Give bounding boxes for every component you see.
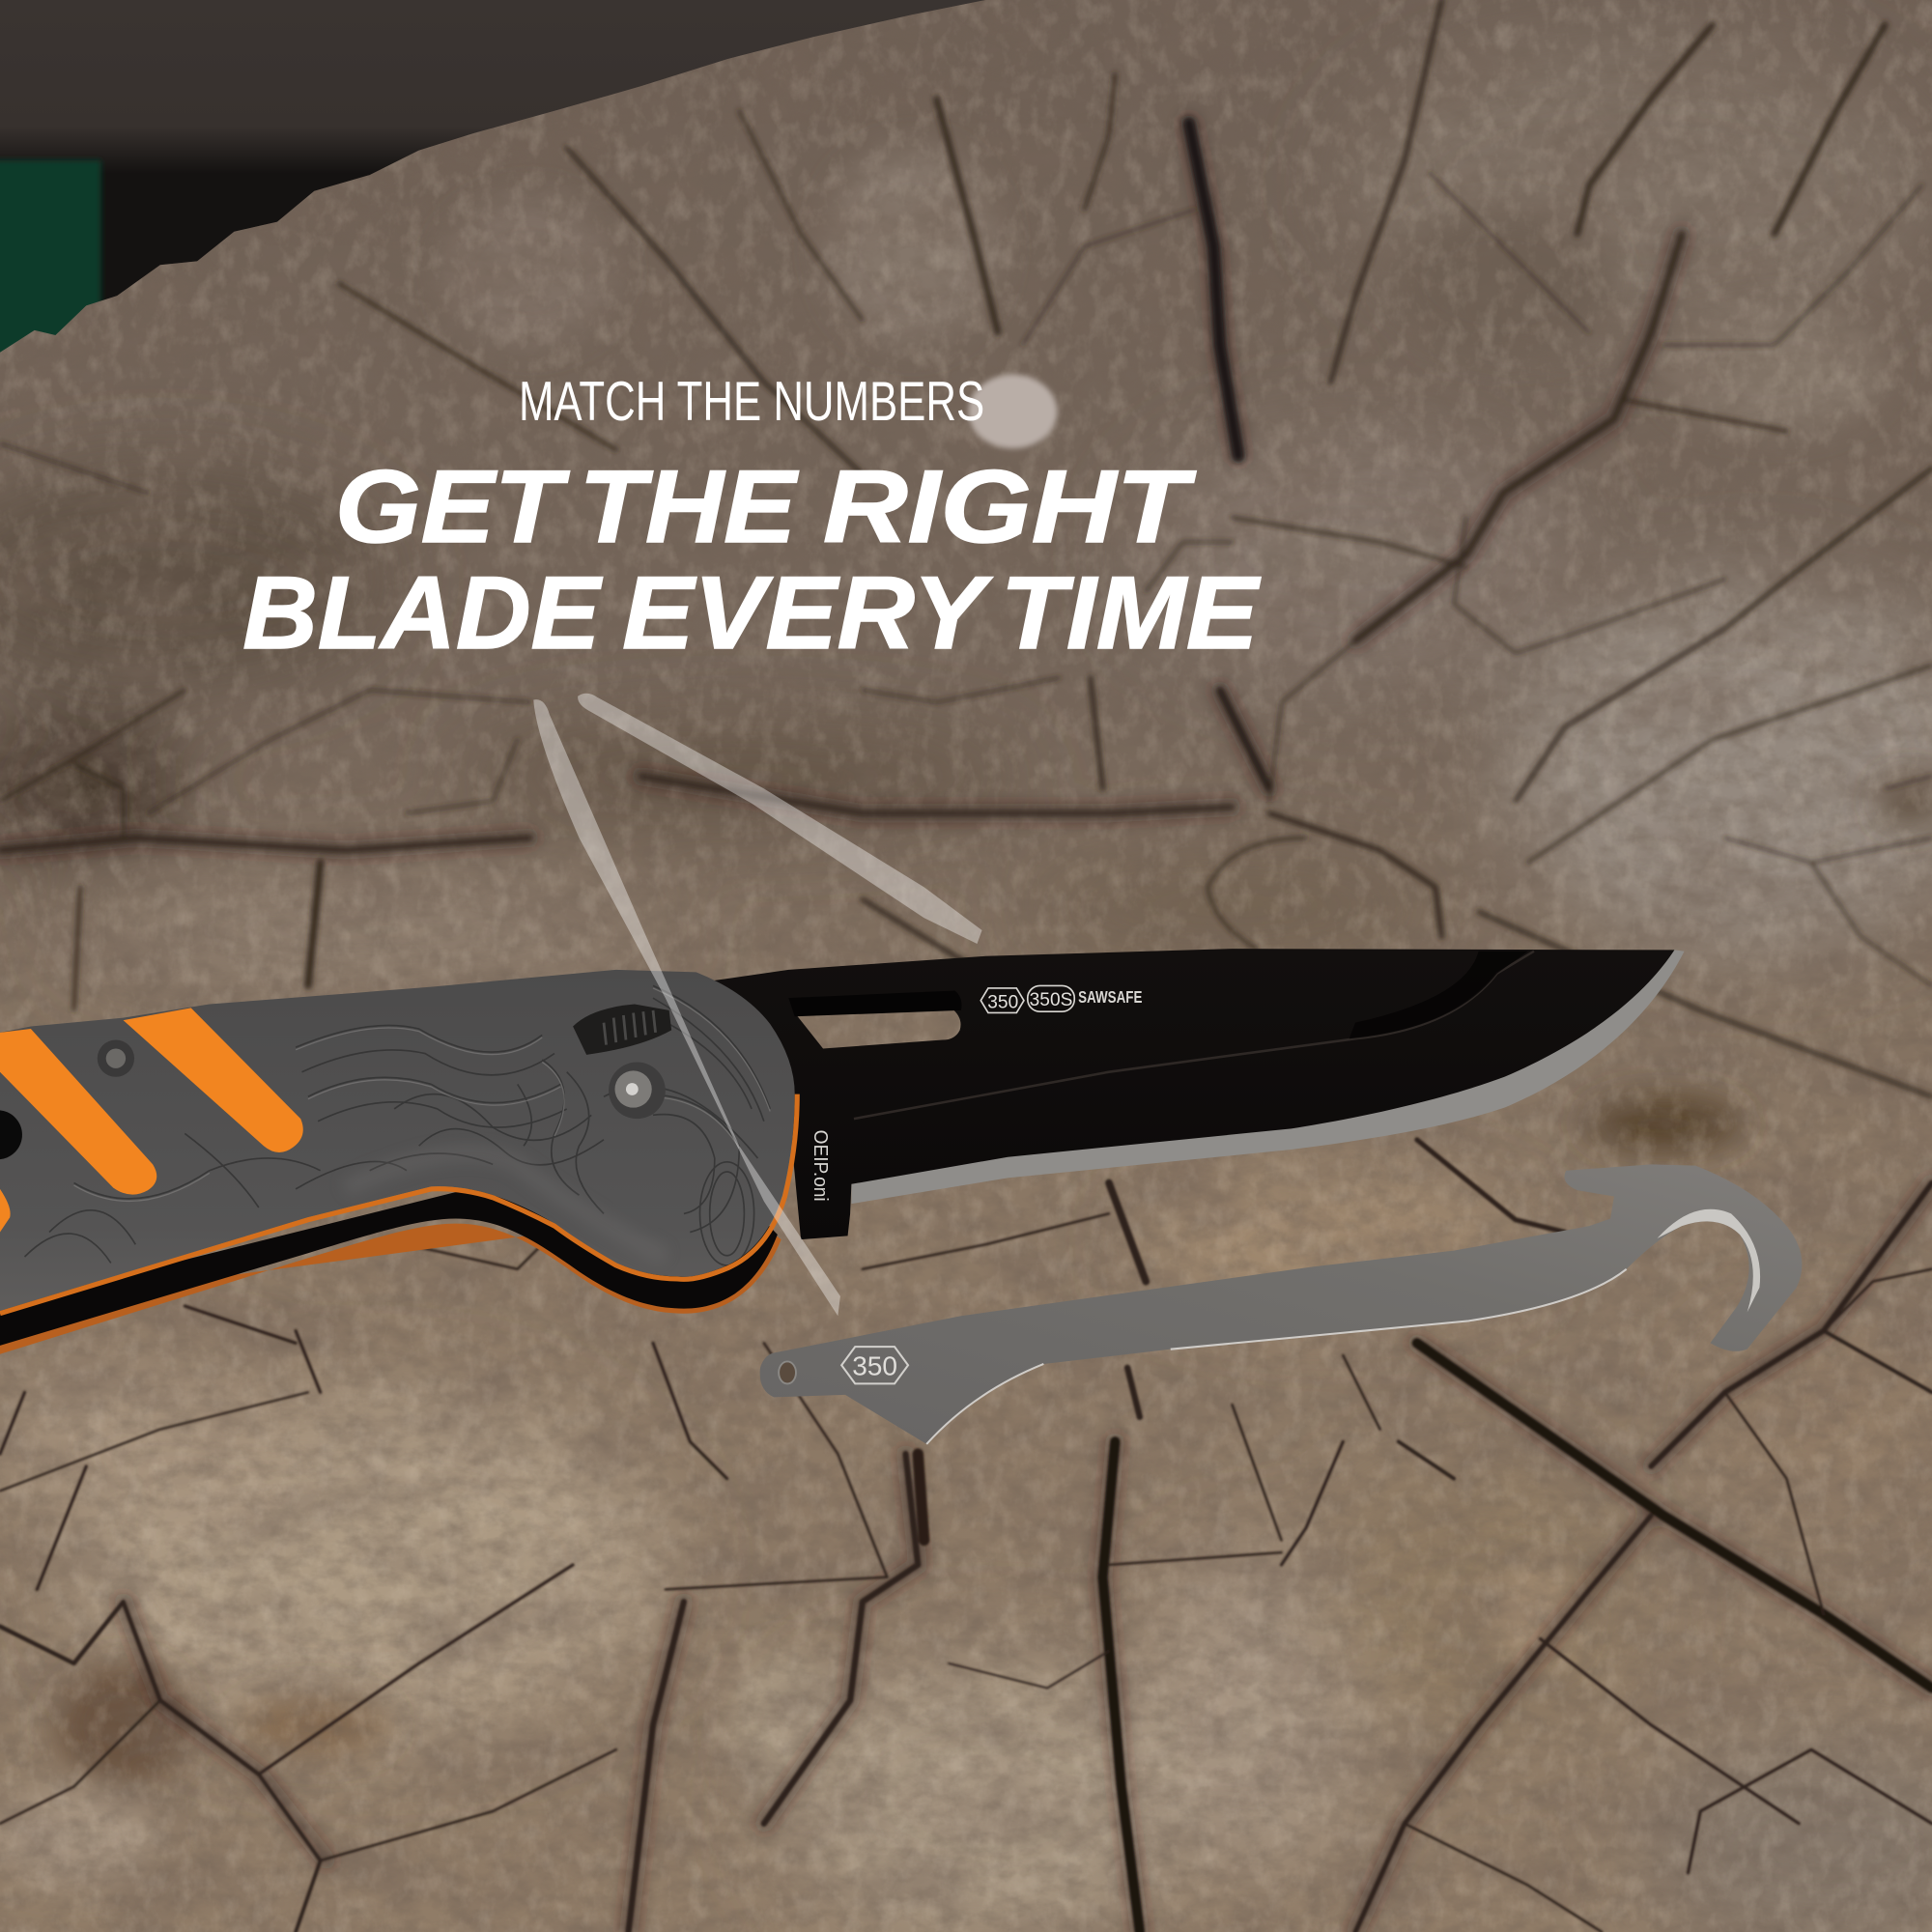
upper blurred cracks (0, 0, 1932, 1096)
headline line one: GET (335, 448, 570, 564)
fuller shade (1350, 952, 1528, 1038)
headline line two: BLADE (242, 554, 604, 670)
translucent brush stroke right (578, 694, 982, 944)
fuller line (854, 952, 1534, 1119)
hook bright inner face (1658, 1209, 1760, 1312)
thumb slider (573, 1005, 671, 1055)
dark background behind stump (0, 0, 1932, 394)
orange inlay upper (124, 1008, 303, 1152)
blade marking maker: OEIP.oni (810, 1130, 831, 1202)
headline line two: TIME (1001, 554, 1262, 670)
translucent brush stroke left (533, 699, 840, 1316)
rear black liner (0, 1182, 778, 1346)
hook lanyard hole (779, 1361, 796, 1383)
headline (242, 448, 1262, 670)
lower sharp cracks (0, 1140, 1932, 1932)
blade marking 350S text: 350S (1030, 990, 1072, 1010)
slot upper edge (788, 991, 961, 1016)
grey handle scale (0, 970, 795, 1311)
blade marking 350 text: 350 (987, 992, 1018, 1012)
handle screw (98, 1040, 134, 1077)
headline line two: EVERY (622, 554, 993, 670)
blade marking hexagon and pill (980, 985, 1074, 1012)
hook blade accessory (760, 1164, 1802, 1444)
hook body (760, 1164, 1802, 1444)
orange handle edge (0, 1094, 797, 1314)
pale stone on stump (969, 375, 1057, 448)
black pivot (0, 1110, 22, 1159)
hook 350 text: 350 (852, 1350, 897, 1380)
orange inlay fragment (0, 1189, 11, 1233)
kicker text: MATCH THE NUMBERS (519, 371, 984, 433)
hook lit edge (926, 1269, 1627, 1444)
rear orange scale (0, 1208, 781, 1354)
handle topographic texture (25, 985, 770, 1265)
headline line one: RIGHT (823, 448, 1196, 564)
folding knife (0, 949, 1685, 1354)
headline line one: THE (579, 448, 800, 564)
handle pivot screw (609, 1062, 666, 1119)
knife blade (712, 949, 1685, 1239)
blade body and tang (712, 949, 1674, 1239)
blade bevel (851, 950, 1685, 1204)
blade marking SAWSAFE: SAWSAFE (1078, 987, 1142, 1007)
orange inlay lower (0, 1029, 156, 1195)
hook 350 hex (841, 1347, 908, 1383)
